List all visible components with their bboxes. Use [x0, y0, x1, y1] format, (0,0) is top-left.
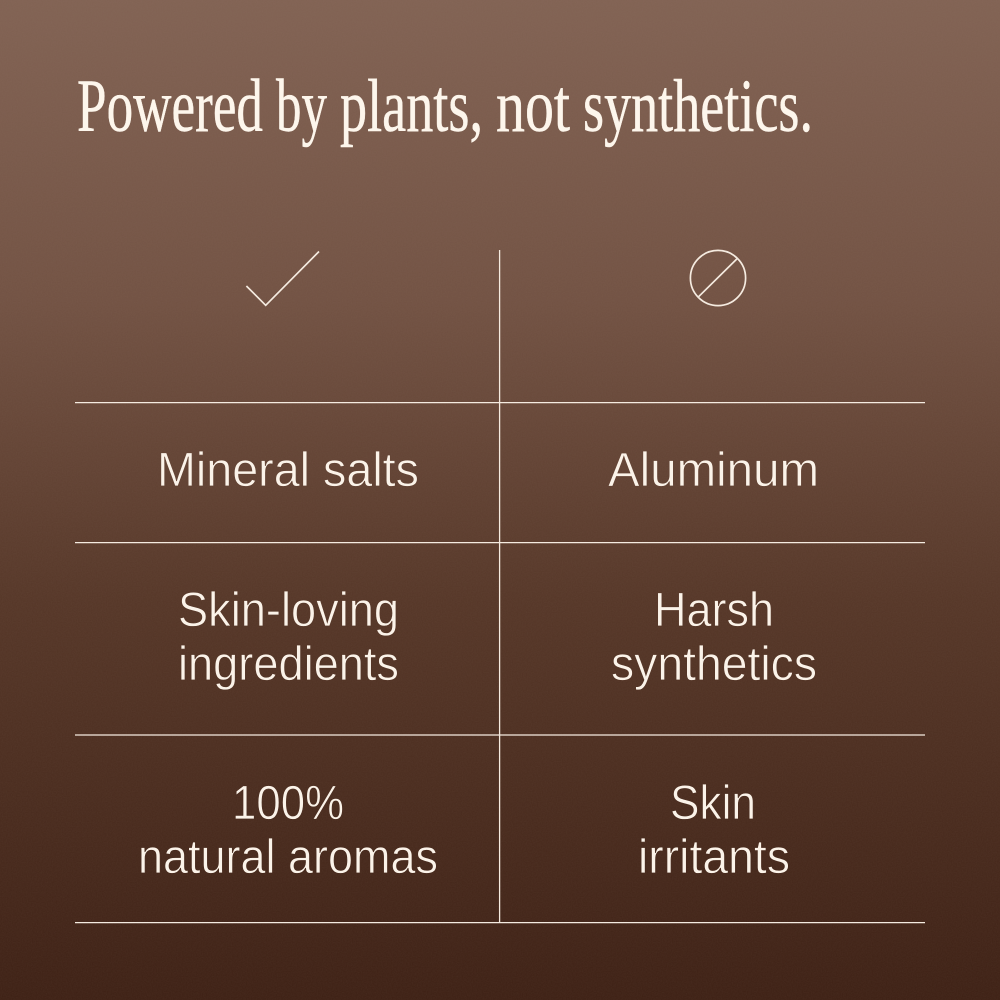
row 2 left: Skin-loving ingredients: Skin-loving	[178, 584, 399, 637]
table grid lines	[75, 250, 925, 923]
row 3 left: 100% natural aromas: natural aromas	[138, 831, 438, 884]
row 2 right: Harsh synthetics	[611, 584, 817, 691]
row 3 right: Skin irritants: Skin	[670, 777, 756, 830]
title: plants,	[340, 65, 483, 148]
row 2 right: Harsh synthetics: Harsh	[654, 584, 774, 637]
title	[77, 65, 813, 148]
title: synthetics.	[583, 65, 813, 148]
icon: prohibited sign	[690, 250, 746, 306]
row 1 left: Mineral salts: Mineral salts	[157, 444, 419, 497]
icon: check mark	[246, 252, 319, 305]
row 2 right: Harsh synthetics: synthetics	[611, 638, 817, 691]
title: not	[496, 65, 570, 148]
title: by	[276, 65, 327, 148]
row 3 right: Skin irritants: irritants	[638, 831, 790, 884]
row 3 right: Skin irritants	[638, 777, 790, 884]
row 2 left: Skin-loving ingredients: ingredients	[178, 638, 399, 691]
row 3 left: 100% natural aromas	[138, 777, 438, 884]
row 3 left: 100% natural aromas: 100%	[232, 777, 344, 830]
title: Powered	[77, 65, 263, 148]
row 1 right: Aluminum: Aluminum	[608, 444, 819, 497]
comparison table	[75, 250, 925, 923]
row 2 left: Skin-loving ingredients	[178, 584, 399, 691]
